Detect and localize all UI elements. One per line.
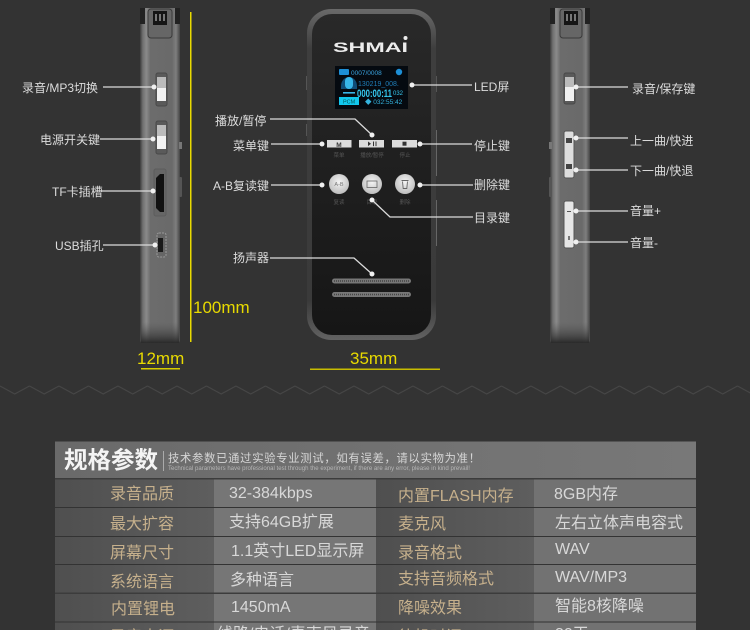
left side view of device	[140, 8, 182, 343]
right spec values: WAV	[555, 541, 590, 558]
table header	[55, 442, 696, 478]
callout labels: 下一曲/快退	[630, 164, 693, 178]
callout labels: LED屏	[474, 80, 509, 94]
right spec labels: 录音格式	[398, 544, 462, 562]
left spec labels: 最大扩容	[110, 515, 174, 533]
left spec labels: 内置锂电	[111, 600, 175, 618]
right spec labels: 内置FLASH内存	[398, 487, 514, 505]
LED screen: 0007/0008	[351, 70, 382, 77]
callout labels: TF卡插槽	[52, 185, 103, 199]
left spec values: 支持64GB扩展	[229, 513, 334, 531]
logo	[333, 36, 408, 55]
callout labels: 删除键	[474, 177, 510, 192]
center front view of device	[306, 9, 437, 340]
playback keys: 菜单	[333, 151, 345, 159]
right spec values: 8GB内存	[554, 485, 618, 503]
round keys: A-B	[334, 182, 344, 188]
callout labels: 上一曲/快进	[630, 134, 693, 148]
right spec labels: 支持音频格式	[398, 570, 494, 588]
left spec labels: 录音品质	[110, 485, 174, 503]
playback keys: 停止	[399, 151, 411, 159]
right spec values: 智能8核降噪	[555, 597, 644, 615]
left spec labels: 系统语言	[110, 573, 174, 591]
round keys: 复读	[333, 198, 345, 206]
left spec values: 1.1英寸LED显示屏	[231, 542, 364, 560]
dimension: thickness 12mm: 12mm	[137, 349, 184, 368]
dimension: width 35mm: 35mm	[350, 349, 397, 368]
right spec labels: 降噪效果	[398, 599, 462, 617]
callout labels: 录音/MP3切换	[22, 80, 98, 95]
dimension: width 35mm	[310, 349, 440, 370]
LED screen: PCM	[343, 100, 356, 106]
right spec values: WAV/MP3	[555, 569, 627, 586]
leader lines and dots	[100, 82, 628, 276]
spec table	[55, 442, 696, 630]
callout labels: 音量+	[630, 203, 661, 218]
left spec values: 1450mA	[231, 599, 291, 616]
callout labels: A-B复读键	[213, 179, 269, 193]
left spec labels	[110, 485, 175, 630]
round keys: 目录	[366, 198, 378, 206]
left spec labels: 屏幕尺寸	[110, 544, 174, 562]
callout labels: 目录键	[474, 211, 510, 225]
playback keys	[327, 140, 417, 159]
round keys	[329, 174, 415, 206]
callout labels: 音量-	[630, 235, 658, 250]
callout labels: 菜单键	[233, 139, 269, 153]
LED screen: 000:00:11	[357, 88, 392, 100]
callout labels	[22, 80, 695, 265]
table cells	[55, 478, 696, 630]
LED screen: 032	[393, 91, 404, 97]
right spec labels: 麦克风	[398, 515, 446, 533]
right spec values	[554, 485, 683, 630]
playback keys: 播放/暂停	[360, 151, 384, 159]
speaker slots	[332, 278, 411, 297]
right spec values: 左右立体声电容式	[555, 514, 683, 532]
LED screen: 130219_008.	[358, 81, 399, 88]
callout labels: 电源开关键	[40, 133, 100, 147]
LED screen	[335, 66, 408, 109]
zigzag divider	[0, 384, 750, 396]
right spec labels	[398, 487, 514, 630]
round keys: 删除	[399, 198, 411, 206]
left spec values: 多种语言	[230, 571, 294, 589]
left spec values	[217, 485, 370, 630]
callout labels: 扬声器	[233, 250, 269, 265]
right side view of device	[549, 8, 590, 343]
left spec values: 32-384kbps	[229, 485, 313, 502]
callout labels: 播放/暂停	[215, 113, 266, 128]
table header: 技术参数已通过实验专业测试，如有误差，请以实物为准！	[168, 451, 480, 465]
table header: Technical parameters have professional test through the experiment, if there are any error, please in kind prevail!	[168, 465, 470, 472]
table header: 规格参数	[64, 446, 158, 473]
dimension: height 100mm: 100mm	[193, 298, 250, 317]
callout labels: 停止键	[474, 138, 510, 153]
callout labels: 录音/保存键	[632, 81, 695, 96]
logo: SHMAI	[333, 39, 408, 55]
playback keys: M	[336, 142, 342, 149]
callout labels: USB插孔	[55, 239, 104, 253]
LED screen: ◆ 032:55:42	[365, 98, 403, 106]
